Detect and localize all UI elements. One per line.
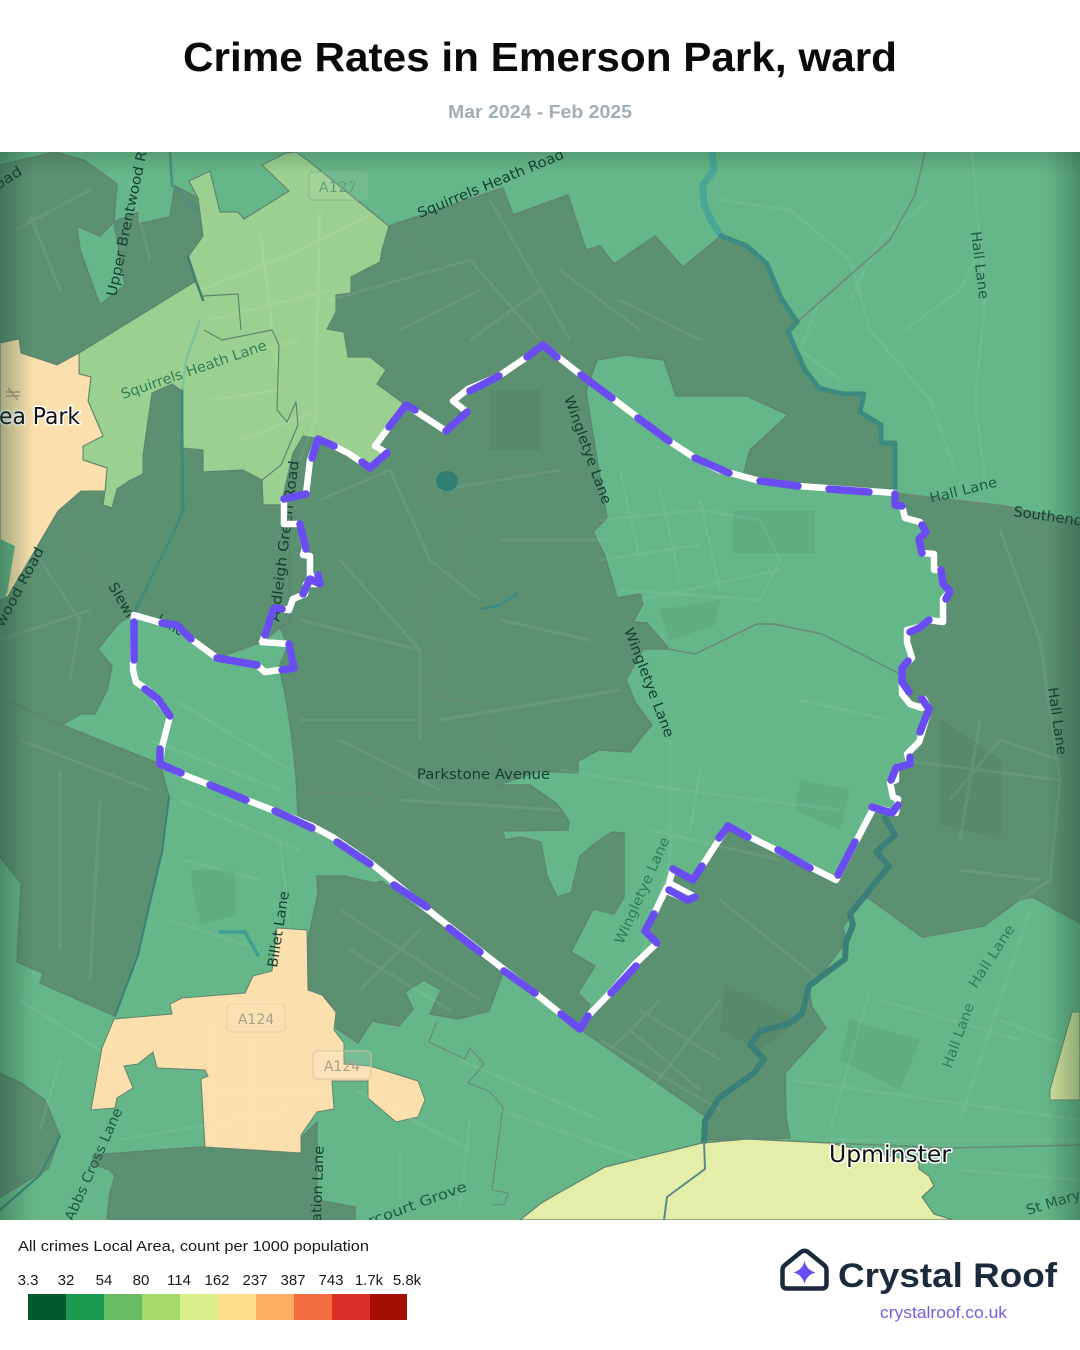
road shield: A127 bbox=[309, 172, 368, 200]
road shield: A124 east: A124 bbox=[324, 1059, 360, 1075]
road labels: Squirrels Heath Road bbox=[415, 147, 567, 222]
road labels: Lane bbox=[154, 612, 186, 639]
map regions: dark green low-crime areas bbox=[0, 152, 1080, 1220]
legend tick labels: 32 bbox=[58, 1272, 74, 1289]
map edge vignette bbox=[0, 152, 1080, 1220]
road labels: St Mary bbox=[1024, 1187, 1080, 1219]
icon: house with star bbox=[782, 1251, 826, 1288]
place label: Upminster: Upminster bbox=[829, 1142, 952, 1168]
road shield: A127: A127 bbox=[319, 180, 357, 196]
road labels: Ardleigh Green Road bbox=[267, 460, 303, 622]
road labels: Hall Lane bbox=[940, 1001, 978, 1070]
road labels: Southend bbox=[1012, 504, 1080, 530]
map region: pale yellow patch east bbox=[1050, 1012, 1080, 1100]
legend tick labels bbox=[18, 1272, 422, 1289]
legend tick labels: 80 bbox=[133, 1272, 149, 1289]
street network bbox=[0, 152, 1080, 1210]
road labels: ation Lane bbox=[309, 1146, 328, 1222]
legend tick labels: 54 bbox=[96, 1272, 112, 1289]
legend title: All crimes Local Area, count per 1000 population bbox=[18, 1238, 369, 1255]
subtle darker patches in medium green areas bbox=[190, 511, 920, 1090]
road labels: Upper Brentwood R bbox=[104, 149, 151, 298]
road labels: Hall Lane bbox=[928, 475, 999, 507]
legend tick labels: 3.3 bbox=[18, 1272, 38, 1289]
title: Crime Rates in Emerson Park, ward bbox=[183, 34, 897, 80]
road labels: Wingletye Lane bbox=[560, 394, 614, 506]
legend tick labels: 114 bbox=[167, 1272, 191, 1289]
road labels: Slewi bbox=[105, 580, 137, 621]
map region: light green area bbox=[79, 152, 403, 508]
map region: pale yellow Upminster bbox=[520, 1139, 953, 1220]
road labels: Billet Lane bbox=[265, 890, 293, 969]
road labels: Hall Lane bbox=[1044, 686, 1069, 756]
rivers and streams bbox=[0, 152, 895, 1220]
grey boundary lines bbox=[58, 152, 1080, 1205]
legend tick labels: 387 bbox=[280, 1272, 306, 1289]
legend tick labels: 5.8k bbox=[393, 1272, 422, 1289]
road labels: Parkstone Avenue bbox=[417, 767, 550, 783]
road labels: rcourt Grove bbox=[366, 1179, 469, 1230]
station symbol bbox=[6, 388, 20, 400]
road shield: A124 west bbox=[227, 1004, 285, 1032]
map region: peach area A124 bbox=[91, 928, 425, 1153]
legend bbox=[18, 1238, 422, 1320]
darker patches inside dark areas bbox=[738, 830, 999, 1002]
website: crystalroof.co.uk bbox=[880, 1304, 1008, 1322]
logo: Crystal Roof bbox=[782, 1251, 1058, 1322]
place label: Emerson Park: ea Park bbox=[0, 404, 81, 430]
road labels: Wingletye Lane bbox=[612, 835, 673, 947]
legend tick labels: 237 bbox=[242, 1272, 268, 1289]
map region: medium green patch west edge bbox=[0, 539, 15, 594]
road labels: Squirrels Heath Lane bbox=[119, 338, 269, 403]
wordmark: Crystal Roof bbox=[838, 1257, 1058, 1295]
road labels: Wingletye Lane bbox=[620, 626, 677, 740]
road labels: Hall Lane bbox=[967, 231, 991, 300]
subtitle: date range: Mar 2024 - Feb 2025 bbox=[448, 102, 632, 122]
map region: peach area west bbox=[0, 339, 107, 598]
legend tick labels: 162 bbox=[204, 1272, 230, 1289]
road labels: Hall Lane bbox=[966, 922, 1019, 991]
road labels: Abbs Cross Lane bbox=[62, 1106, 126, 1224]
legend colour ramp bbox=[28, 1294, 407, 1320]
road shield: A124 east bbox=[313, 1051, 371, 1079]
ward boundary: dashed white and purple bbox=[133, 345, 950, 1029]
pond bbox=[436, 471, 458, 491]
road shield: A124 west: A124 bbox=[238, 1012, 274, 1028]
legend tick labels: 743 bbox=[318, 1272, 344, 1289]
legend tick labels: 1.7k bbox=[355, 1272, 384, 1289]
